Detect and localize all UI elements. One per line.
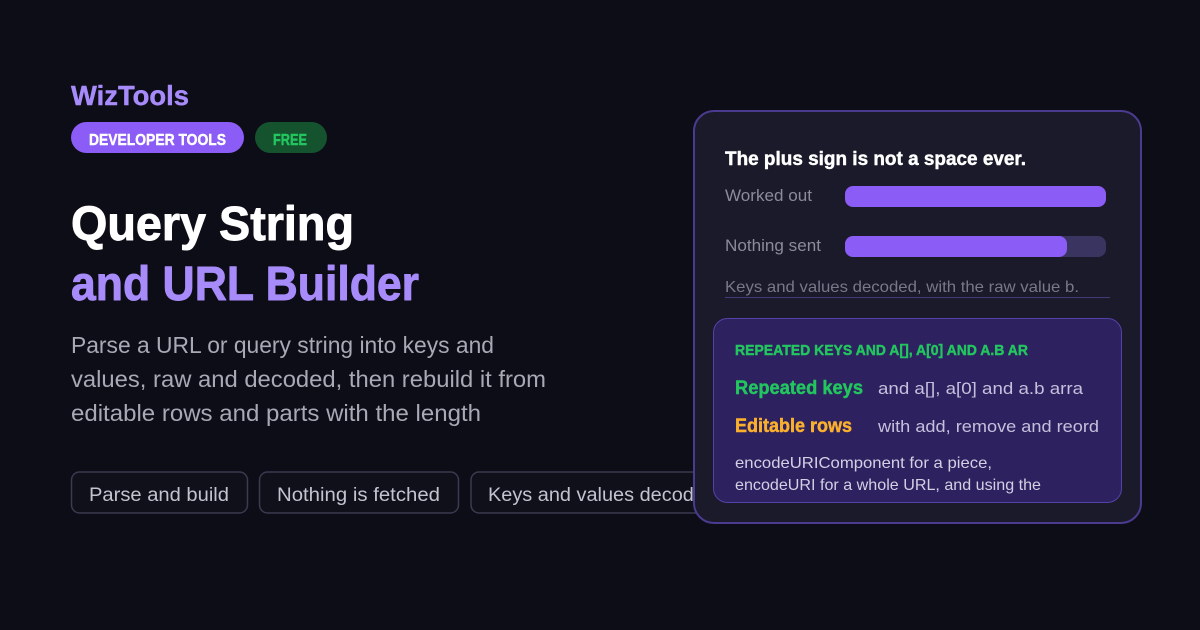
description: editable rows and parts with the length: [71, 400, 481, 426]
panel: repeated keys callout: [714, 318, 1122, 502]
title: Query String: [71, 198, 354, 251]
badge: developer tools: DEVELOPER TOOLS: [89, 132, 226, 149]
badge: free: FREE: [273, 132, 307, 149]
callout text: encodeURIComponent for a piece,: [735, 455, 992, 472]
chip: keys and values decoded: Keys and values decoded: [488, 485, 716, 506]
bar: nothing sent: [725, 236, 1106, 257]
title: [71, 198, 419, 311]
callout label: REPEATED KEYS AND A[], A[0] AND A.B AR: [735, 342, 1028, 359]
row: editable rows: with add, remove and reord: [877, 417, 1099, 436]
chip: parse and build: Parse and build: [89, 485, 229, 506]
chip: parse and build: [72, 472, 248, 513]
card heading: The plus sign is not a space ever.: [725, 149, 1026, 170]
chip: nothing is fetched: Nothing is fetched: [277, 485, 440, 506]
row: editable rows: [735, 416, 1099, 437]
description: [71, 332, 546, 426]
brand name: WizTools: [71, 80, 189, 111]
badge: developer tools: [71, 122, 244, 153]
card note: Keys and values decoded, with the raw value b.: [725, 279, 1079, 296]
callout text: encodeURI for a whole URL, and using the: [735, 477, 1041, 494]
description: values, raw and decoded, then rebuild it from: [71, 366, 546, 392]
chip: keys and values decoded: [471, 472, 741, 513]
chip: nothing is fetched: [260, 472, 458, 513]
panel: result card: [694, 111, 1141, 523]
callout text: [735, 455, 1041, 494]
badge: free: [255, 122, 327, 153]
bar: worked out: Worked out: [725, 186, 812, 205]
row: repeated keys: Repeated keys: [735, 378, 863, 399]
bar: nothing sent: Nothing sent: [725, 236, 821, 255]
row: editable rows: Editable rows: [735, 416, 852, 437]
bar: worked out: [725, 186, 1106, 207]
row: repeated keys: and a[], a[0] and a.b arra: [878, 379, 1084, 398]
description: Parse a URL or query string into keys and: [71, 332, 494, 358]
title: and URL Builder: [71, 258, 419, 311]
row: repeated keys: [735, 378, 1084, 399]
